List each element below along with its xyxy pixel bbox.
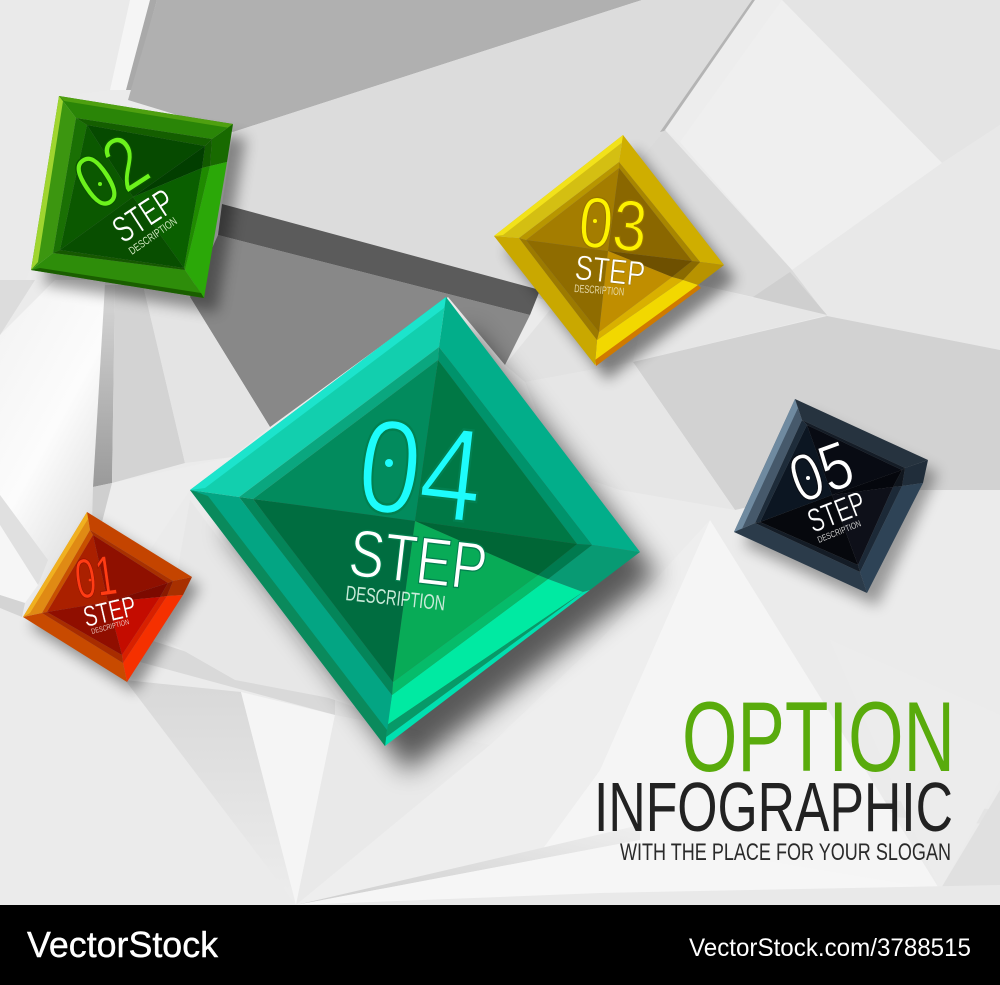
shadow: step 05 tile bbox=[744, 412, 938, 606]
panel: step 03 tile bbox=[494, 135, 724, 366]
label: step: STEP bbox=[105, 181, 182, 251]
footer image id: VectorStock.com/3788515 bbox=[689, 934, 971, 962]
number 04: 04 bbox=[351, 391, 491, 552]
panel: step 01 tile bbox=[23, 512, 192, 682]
number 01: 01 bbox=[71, 543, 120, 611]
label: step: STEP bbox=[573, 248, 647, 294]
label: description: DESCRIPTION bbox=[127, 215, 180, 257]
bevel: step 03 frame and facets bbox=[494, 135, 724, 366]
footer bar bbox=[0, 905, 1000, 985]
number 02: 02 bbox=[58, 116, 163, 227]
label: step: STEP bbox=[80, 591, 139, 634]
label: step: STEP bbox=[345, 515, 491, 606]
bevel: step 04 frame and facets bbox=[190, 297, 640, 746]
bevel: step 05 frame and facets bbox=[734, 399, 928, 593]
shadow: step 04 tile bbox=[225, 330, 658, 772]
label: description: DESCRIPTION bbox=[90, 617, 130, 636]
number 05: 05 bbox=[779, 426, 863, 518]
shadow: step 02 tile bbox=[44, 112, 246, 312]
footer brand: VectorStock bbox=[27, 924, 219, 965]
shadow: step 01 tile bbox=[31, 522, 200, 692]
panel: step 02 tile bbox=[31, 96, 233, 298]
bevel: step 01 frame and facets bbox=[23, 512, 192, 682]
number 01 bbox=[71, 543, 120, 611]
shadow: step 03 tile bbox=[506, 150, 736, 380]
label: description: DESCRIPTION bbox=[816, 518, 862, 545]
panel: step 05 tile bbox=[734, 399, 928, 593]
label: description: DESCRIPTION bbox=[574, 283, 625, 298]
panel: step 04 tile bbox=[190, 297, 640, 746]
title block bbox=[594, 681, 955, 866]
bevel: step 02 frame and facets bbox=[31, 96, 233, 298]
label: step: STEP bbox=[802, 484, 871, 540]
label: description: DESCRIPTION bbox=[344, 582, 446, 615]
number 03: 03 bbox=[576, 182, 650, 268]
